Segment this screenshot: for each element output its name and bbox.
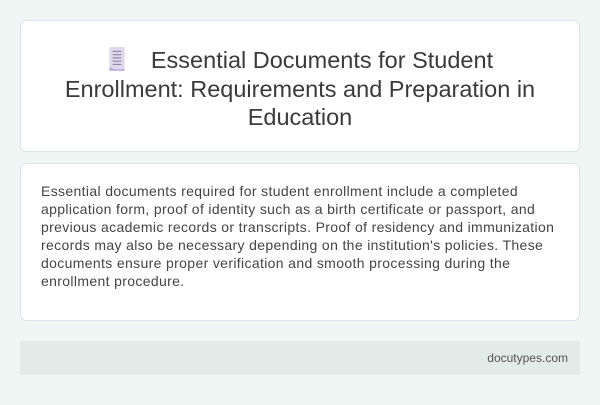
panel: description xyxy=(20,163,580,321)
text block: Essential documents required for student enrollment include a completed xyxy=(41,183,518,199)
text block xyxy=(41,183,554,289)
text block: enrollment procedure. xyxy=(41,273,185,289)
title: Enrollment: Requirements and Preparation in xyxy=(65,76,535,102)
text block: previous academic records or transcripts. Proof of residency and immunization xyxy=(41,219,554,235)
text block: documents ensure proper verification and smooth processing during the xyxy=(41,255,510,271)
title xyxy=(65,47,535,130)
title: Education xyxy=(248,104,352,130)
footer: docutypes.com xyxy=(487,351,568,365)
text block: records may also be necessary depending on the institution's policies. These xyxy=(41,237,543,253)
text block: application form, proof of identity such as a birth certificate or passport, and xyxy=(41,201,535,217)
footer xyxy=(20,341,580,375)
title: Essential Documents for Student xyxy=(151,47,493,73)
icon: document xyxy=(109,47,125,71)
panel: title xyxy=(20,20,580,152)
